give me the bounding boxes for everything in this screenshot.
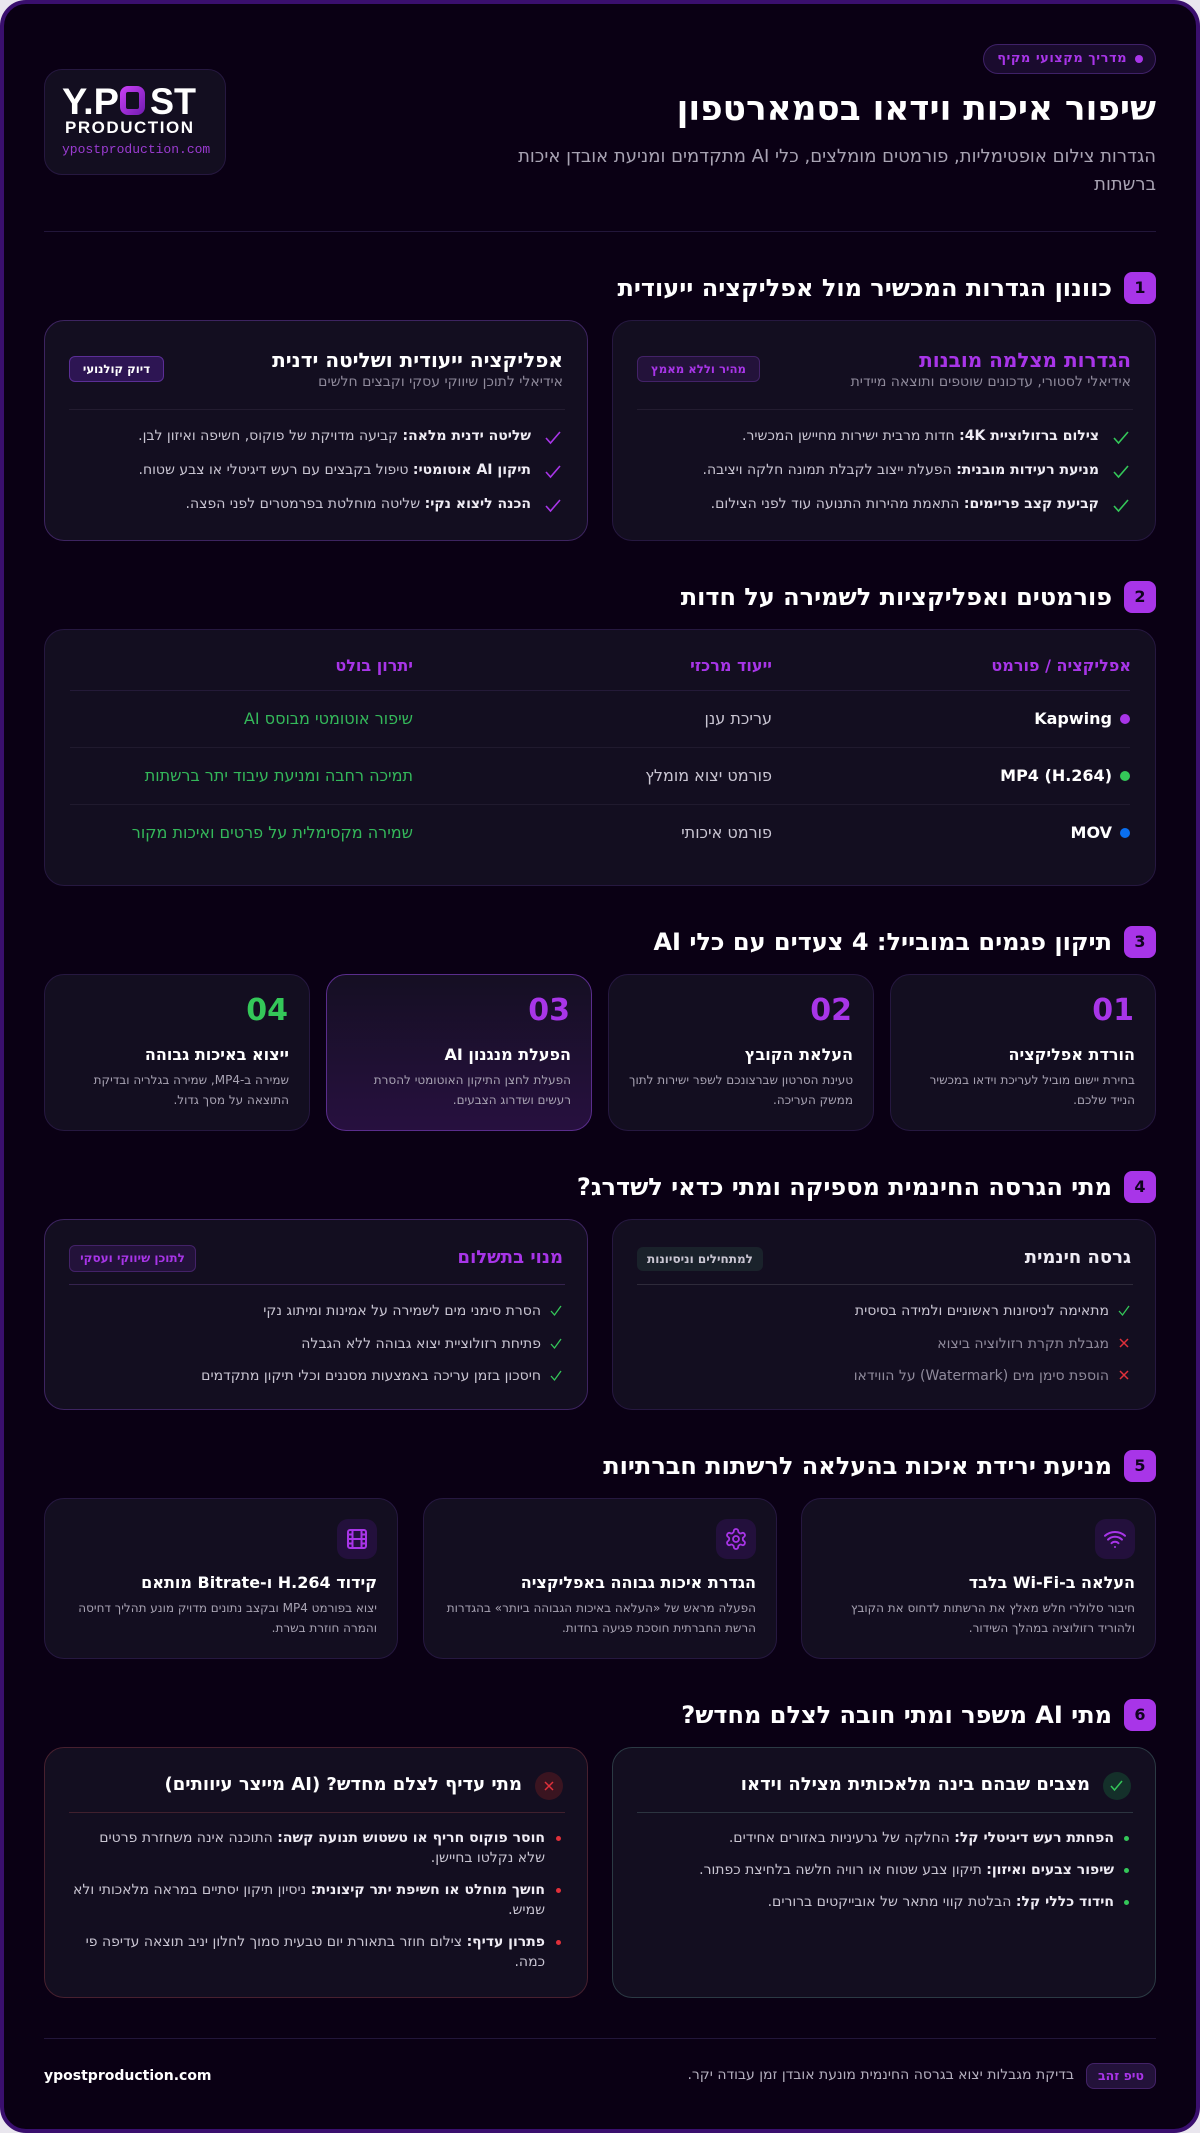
step 02: טעינת הסרטון שברצונכם לשפר ישירות לתוך — [629, 1073, 853, 1087]
row: MOV: MOV — [1071, 823, 1112, 842]
panel: when AI helps — [612, 1747, 1156, 1998]
tip tag: טיפ זהב — [1098, 2068, 1144, 2083]
tag: מהיר וללא מאמץ — [651, 362, 746, 376]
badge: guide pill: מדריך מקצועי מקיף — [997, 51, 1127, 66]
tag — [69, 356, 164, 382]
subtitle — [518, 146, 1156, 195]
table header: ייעוד מרכזי — [690, 656, 772, 675]
step 01: הורדת אפליקציה — [1008, 1045, 1135, 1064]
section 3 heading: 3 — [1134, 932, 1146, 951]
bullet list — [73, 1830, 561, 1970]
tip card: app quality: הרשת החברתית חוסכת פגיעה בחדות. — [562, 1621, 756, 1635]
table header — [335, 656, 1131, 675]
step 02 — [608, 974, 874, 1131]
table header: יתרון בולט — [335, 656, 413, 675]
logo card — [44, 69, 226, 175]
step 03 highlighted: רעשים ושדרוג הצבעים. — [453, 1093, 571, 1107]
step 04: התוצאה על מסך גדול. — [173, 1093, 289, 1107]
section 4 heading: 4 — [1134, 1177, 1146, 1196]
tag — [69, 1245, 196, 1272]
panel: built-in camera settings: אידיאלי לסטורי, עדכונים שוטפים ותוצאה מיידית — [851, 374, 1131, 390]
tag — [637, 1247, 763, 1271]
check list — [703, 428, 1128, 512]
title: שיפור איכות וידאו בסמארטפון — [677, 89, 1156, 129]
tip card: app quality: הפעלה מראש של «העלאה באיכות הגבוהה ביותר» בהגדרות — [447, 1601, 756, 1615]
step 03 highlighted: הפעלת לחצן התיקון האוטומטי להסרת — [374, 1073, 571, 1087]
panel: paid subscription: מנוי בתשלום — [458, 1247, 563, 1268]
step 01 — [890, 974, 1156, 1131]
subtitle: ברשתות — [1094, 174, 1156, 195]
icon: film — [337, 1519, 377, 1559]
tip card: app quality — [423, 1498, 777, 1659]
bullet list: שיפור צבעים ואיזון: תיקון צבע שטוח או רוויה חלשה בלחיצת כפתור. — [699, 1862, 1114, 1878]
panel: when to reshoot — [44, 1747, 588, 1998]
section 6 heading: 6 — [1134, 1705, 1146, 1724]
tag: לתוכן שיווקי ועסקי — [80, 1251, 185, 1265]
tip card: encoding — [44, 1498, 398, 1659]
section 3 heading: תיקון פגמים במובייל: 4 צעדים עם כלי AI — [653, 928, 1112, 956]
row: Kapwing — [244, 709, 1130, 728]
check list: צילום ברזולוציית 4K: חדות מרבית ישירות מחיישן המכשיר. — [742, 428, 1099, 444]
tag: דיוק קולנועי — [83, 362, 150, 376]
section 6 heading: מתי AI משפר ומתי חובה לצלם מחדש? — [681, 1701, 1112, 1729]
row: MP4: פורמט יצוא מומלץ — [645, 766, 772, 785]
step 01: 01 — [1092, 993, 1134, 1028]
step 02: 02 — [810, 993, 852, 1028]
step 04 — [44, 974, 310, 1131]
icon: green check — [1103, 1772, 1131, 1800]
logo wordmark: Y.P — [62, 81, 119, 122]
step 02: ממשק העריכה. — [773, 1093, 853, 1107]
subtitle: הגדרות צילום אופטימליות, פורמטים מומלצים, כלי AI מתקדמים ומניעת אובדן איכות — [518, 146, 1156, 167]
section 2 heading: 2 — [1134, 587, 1146, 606]
bullet list — [699, 1830, 1129, 1910]
section 4 heading: מתי הגרסה החינמית מספיקה ומתי כדאי לשדרג? — [577, 1173, 1112, 1201]
benefits list — [201, 1303, 562, 1384]
step 04: 04 — [246, 993, 288, 1028]
logo wordmark: ST — [150, 81, 196, 122]
row: MOV: שמירה מקסימלית על פרטים ואיכות מקור — [132, 823, 413, 842]
icon: red x — [535, 1772, 563, 1800]
tag — [637, 356, 760, 382]
check list: קביעת קצב פריימים: התאמת מהירות התנועה עוד לפני הצילום. — [711, 496, 1099, 512]
check list: תיקון AI אוטומטי: טיפול בקבצים עם רעש דיגיטלי או צבע שטוח. — [139, 462, 531, 478]
logo wordmark: PRODUCTION — [65, 118, 193, 137]
step 04: שמירה ב-MP4, שמירה בגלריה ובדיקת — [94, 1073, 289, 1087]
step 03 highlighted: הפעלת מנגנון AI — [445, 1045, 571, 1064]
badge: guide pill — [983, 44, 1156, 74]
section 5 heading: 5 — [1134, 1456, 1146, 1475]
pros and cons list — [854, 1303, 1130, 1384]
logo wordmark — [62, 81, 210, 157]
panel: paid subscription — [44, 1219, 588, 1410]
tip card: encoding: יצוא בפורמט MP4 ובקצב נתונים מדויק מונע תהליך דחיסה — [78, 1601, 377, 1615]
bullet list: שלא נקלטו בחיישן. — [431, 1850, 545, 1866]
tip card: Wi-Fi — [801, 1498, 1156, 1659]
pros and cons list: הוספת סימן מים (Watermark) על הווידאו — [854, 1368, 1109, 1384]
section 1 heading: כוונון הגדרות המכשיר מול אפליקציה ייעודית — [617, 274, 1112, 302]
panel: dedicated app — [44, 320, 588, 541]
bullet list: הפחתת רעש דיגיטלי קל: החלקה של גרעיניות באזורים אחידים. — [729, 1830, 1114, 1846]
bullet list: כמה. — [514, 1954, 545, 1970]
pros and cons list: מתאימה לניסיונות ראשוניים ולמידה בסיסית — [855, 1303, 1109, 1319]
bullet list: שמיש. — [508, 1902, 545, 1918]
bullet list: חידוד כללי קל: הבלטת קווי מתאר של אובייקטים ברורים. — [768, 1894, 1114, 1910]
panel: dedicated app: אידיאלי לתוכן שיווקי עסקי וקבצים חלשים — [318, 374, 563, 390]
section 5 heading: מניעת ירידת איכות בהעלאה לרשתות חברתיות — [603, 1452, 1112, 1480]
tip card: encoding: קידוד H.264 ו-Bitrate מותאם — [141, 1573, 377, 1592]
icon: wifi — [1095, 1519, 1135, 1559]
tip card: Wi-Fi: העלאה ב-Wi-Fi בלבד — [969, 1573, 1135, 1592]
step 03 highlighted: 03 — [528, 993, 570, 1028]
check list: הכנה ליצוא נקי: שליטה מוחלטת בפרמטרים לפני הפצה. — [186, 496, 531, 512]
tag: למתחילים וניסיונות — [647, 1252, 753, 1266]
step 03 highlighted — [326, 974, 592, 1131]
tip card: app quality: הגדרת איכות גבוהה באפליקציה — [521, 1573, 756, 1592]
tip card: Wi-Fi: חיבור סלולרי חלש מאלץ את הרשתות לדחוס את הקובץ — [851, 1601, 1135, 1615]
logo wordmark: ypostproduction.com — [62, 142, 210, 157]
row: MP4 — [144, 766, 1130, 785]
step 02: העלאת הקובץ — [745, 1045, 853, 1064]
panel: when to reshoot: מתי עדיף לצלם מחדש? (AI מייצר עיוותים) — [165, 1774, 522, 1795]
bullet list: חושך מוחלט או חשיפת יתר קיצונית: ניסיון תיקון יסתיים במראה מלאכותי ולא — [73, 1882, 545, 1898]
bullet list: פתרון עדיף: צילום חוזר בתאורת יום טבעית סמוך לחלון יניב תוצאה עדיפה פי — [86, 1934, 545, 1950]
benefits list: חיסכון בזמן עריכה באמצעות מסננים וכלי תיקון מתקדמים — [201, 1368, 541, 1384]
heading: הגדרות מצלמה מובנות — [919, 348, 1131, 372]
row: MP4: MP4 (H.264) — [1000, 766, 1112, 785]
row: MOV: פורמט איכותי — [681, 823, 772, 842]
tip card: encoding: והמרה חוזרת בשרת. — [272, 1621, 377, 1635]
panel: free version — [612, 1219, 1156, 1410]
row: Kapwing: שיפור אוטומטי מבוסס AI — [244, 709, 413, 728]
footer website: ypostproduction.com — [44, 2068, 212, 2084]
step 01: בחירת יישום מוביל לעריכת וידאו במכשיר — [930, 1073, 1135, 1087]
footer tip: בדיקת מגבלות יצוא בגרסה החינמית מונעת אובדן זמן עבודה יקר. — [687, 2067, 1074, 2083]
row: Kapwing: Kapwing — [1034, 709, 1112, 728]
section 2 heading: פורמטים ואפליקציות לשמירה על חדות — [681, 583, 1112, 611]
footer tip — [687, 2063, 1156, 2089]
check list: מניעת רעידות מובנית: הפעלת ייצוב לקבלת תמונה חלקה ויציבה. — [703, 462, 1099, 478]
check list: שליטה ידנית מלאה: קביעה מדויקת של פוקוס, חשיפה ואיזון לבן. — [138, 428, 531, 444]
panel: when AI helps: מצבים שבהם בינה מלאכותית מצילה וידאו — [741, 1774, 1090, 1795]
row: MP4: תמיכה רחבה ומניעת עיבוד יתר ברשתות — [145, 766, 413, 785]
row: Kapwing: עריכת ענן — [705, 709, 772, 728]
step 04: ייצוא באיכות גבוהה — [145, 1045, 289, 1064]
panel: built-in camera settings — [612, 320, 1156, 541]
panel: formats table — [44, 629, 1156, 886]
icon: settings gear — [716, 1519, 756, 1559]
tip tag — [1086, 2063, 1156, 2089]
section 1 heading: 1 — [1134, 278, 1146, 297]
bullet list: חוסר פוקוס חריף או טשטוש תנועה קשה: התוכנה אינה משחזרת פרטים — [99, 1830, 545, 1846]
step 01: הנייד שלכם. — [1073, 1093, 1135, 1107]
check list — [138, 428, 560, 512]
pros and cons list: מגבלת תקרת רזולוציה ביצוא — [937, 1336, 1109, 1352]
benefits list: פתיחת רזולוציית יצוא גבוהה ללא הגבלה — [301, 1336, 541, 1352]
benefits list: הסרת סימני מים לשמירה על אמינות ומיתוג נקי — [263, 1303, 541, 1319]
tip card: Wi-Fi: ולהוריד רזולוציה במהלך השידור. — [969, 1621, 1135, 1635]
heading: אפליקציה ייעודית ושליטה ידנית — [272, 348, 563, 372]
table header: אפליקציה / פורמט — [991, 656, 1131, 675]
panel: free version: גרסה חינמית — [1025, 1247, 1131, 1268]
row: MOV — [132, 823, 1130, 842]
